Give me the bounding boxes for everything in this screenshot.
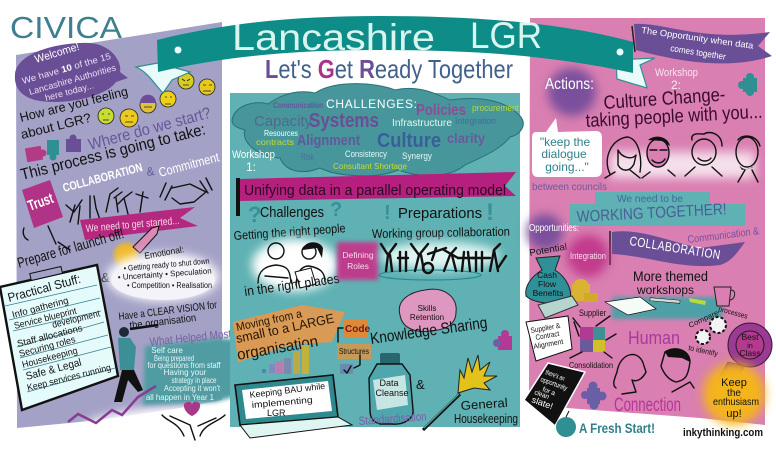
icon: cash flow bag: Benefits	[533, 288, 563, 298]
subtitle: let's get ready together: Let's Get Ready Together	[265, 54, 513, 84]
heading: culture change: Culture Change-	[603, 85, 726, 114]
callout: keep the enthusiasm up: Keep	[721, 377, 747, 389]
clipboard: practical stuff: Securing roles	[18, 334, 77, 360]
callout: supplier and contract alignment	[526, 316, 572, 361]
label: workshop 2	[655, 67, 698, 92]
illustration: brain skills retention: Skills	[418, 304, 436, 313]
banner: moving to a large organisation	[233, 305, 345, 364]
illustration: laptop keeping BAU: LGR	[267, 408, 286, 418]
welcome speech bubble: We have 10 of the 15	[21, 51, 112, 86]
label: actions	[545, 68, 596, 116]
heading: how are you feeling: about LGR?	[19, 110, 93, 142]
what helped most panel: strategy in place	[172, 376, 217, 385]
clipboard: practical stuff: Practical Stuff:	[6, 272, 82, 305]
flow: code to structures	[337, 320, 371, 374]
icon: rocket	[114, 226, 159, 267]
callout: defining roles	[337, 242, 378, 280]
illustration: laptop keeping BAU: implementing	[251, 395, 313, 410]
cloud: challenges: Systems	[309, 110, 379, 132]
clipboard: practical stuff: Info gathering	[11, 295, 70, 321]
icon: raised hands	[66, 188, 148, 224]
what helped most panel: all happen in Year 1	[146, 393, 215, 402]
diagram: compare processes with gears: processes	[717, 304, 749, 321]
callout: supplier and contract alignment: Supplier &	[530, 321, 561, 335]
heading: connection: Connection	[614, 395, 681, 416]
icon: emoji faces	[98, 73, 215, 127]
heading: preparations	[384, 199, 494, 226]
badge: best in class rosette	[718, 323, 772, 382]
banner: moving to a large organisation: small to a LARGE	[235, 310, 336, 346]
label: workshop 2: 2:	[671, 78, 681, 92]
cloud: challenges: Risk	[301, 152, 314, 162]
speech bubble: keep the dialogue going: "keep the	[540, 135, 590, 149]
welcome speech bubble: Welcome!	[33, 41, 81, 66]
heading: prepare for launch off: Prepare for launch off!	[16, 226, 126, 272]
badge: trust	[22, 180, 63, 228]
right ribbon tail	[616, 58, 655, 88]
badge: trust: Trust	[26, 190, 56, 215]
ampersand: &	[101, 270, 110, 285]
title text: Lancashire	[232, 17, 435, 58]
speech bubble: keep the dialogue going	[532, 118, 602, 177]
callout: keep the enthusiasm up	[703, 363, 765, 425]
heading: how are you feeling	[18, 84, 129, 142]
heading: challenges: ?	[330, 199, 342, 221]
heading: human: Human	[628, 328, 680, 348]
what helped most panel: What Helped Most	[149, 326, 232, 349]
badge: best in class rosette: Class	[739, 348, 761, 358]
heading: where do we start: Where do we start?	[87, 105, 213, 154]
diagram: compare processes with gears: to identify	[688, 343, 719, 358]
callout: integration	[567, 235, 609, 277]
heading: this process: This process is going to take:	[19, 121, 207, 184]
cloud: emotional: • Getting ready to shut down	[123, 257, 210, 273]
what helped most panel: for questions from staff	[148, 361, 221, 370]
cloud: challenges: Communication	[273, 101, 323, 110]
heading: collaboration and commitment	[61, 149, 221, 195]
welcome speech bubble: Lancashire Authorities	[28, 62, 118, 97]
chalkboard: fresh start: for a	[541, 386, 556, 397]
text: general housekeeping	[454, 396, 518, 426]
cloud: emotional: • Competition • Realisation	[127, 281, 212, 290]
text: general housekeeping: Housekeeping	[454, 412, 518, 426]
icon: cash flow bag: Flow	[538, 279, 557, 289]
cloud: challenges: Policies	[416, 102, 466, 119]
callout: defining roles: Defining	[342, 250, 374, 260]
heading: knowledge sharing: Knowledge Sharing	[369, 315, 488, 348]
text: a fresh start: A Fresh Start!	[579, 420, 655, 436]
callout: keep the enthusiasm up: up!	[726, 408, 742, 420]
clipboard: practical stuff: Safe & Legal	[25, 357, 83, 383]
what helped most panel: Being prepared	[154, 354, 194, 363]
diagram: supplier consolidation puzzle: Supplier	[579, 308, 606, 319]
cloud: challenges: procurement	[472, 103, 519, 113]
heading: challenges: ?	[248, 202, 261, 227]
clipboard: practical stuff: Staff allocations	[16, 323, 84, 350]
cloud: challenges: Consistency	[345, 149, 387, 159]
icon: apple	[556, 411, 576, 437]
label: workshop 1	[232, 149, 275, 174]
ribbon: the opportunity: comes together	[670, 43, 727, 62]
callout: defining roles: Roles	[347, 261, 369, 271]
welcome speech bubble	[15, 41, 128, 103]
heading: collaboration and commitment: &	[145, 164, 155, 179]
cloud: emotional	[107, 244, 219, 301]
chalkboard: fresh start: opportunity	[539, 376, 568, 393]
diagram: compare processes with gears: Compare	[687, 308, 720, 330]
icon: handshake	[160, 178, 212, 204]
teal banner	[157, 16, 633, 73]
white band behind faces	[610, 152, 755, 178]
clipboard: practical stuff: Housekeeping	[21, 346, 79, 371]
credit: inkythinking.com: inkythinking.com	[683, 427, 763, 439]
cloud: emotional: Emotional:	[144, 244, 185, 261]
icon: pink puzzle piece	[493, 330, 512, 350]
text: working group collaboration: Working group collaboration	[372, 225, 510, 241]
clipboard: practical stuff: Keep services running	[26, 362, 112, 394]
cloud: challenges: contracts	[256, 137, 294, 147]
heading: challenges: Challenges	[260, 204, 324, 221]
label: standardisation: Standardisation	[358, 409, 427, 428]
left panel background	[16, 22, 222, 428]
text: more themed workshops: More themed	[633, 268, 708, 284]
label: potential: Potential	[529, 242, 568, 259]
label: workshop 1: Workshop	[232, 149, 275, 161]
cloud: challenges: Alignment	[297, 132, 360, 149]
what helped most panel: Self care	[151, 346, 183, 355]
heading: clear vision: Have a CLEAR VISION for	[118, 299, 218, 323]
callout: integration: Integration	[570, 251, 606, 262]
heading: clear vision: the organisation	[129, 312, 197, 332]
logo: CIVICA: CIVICA	[10, 10, 122, 45]
white fade at bottom of left panel	[80, 406, 320, 450]
banner: moving to a large organisation: Moving from a	[235, 308, 304, 334]
cloud: challenges: CHALLENGES:	[326, 97, 418, 111]
ampersand: &	[416, 377, 425, 392]
cloud: challenges: Infrastructure	[392, 118, 452, 129]
heading: collaboration and commitment: COLLABORATION	[61, 160, 144, 195]
heading: clear vision	[118, 299, 218, 332]
icon: cash flow bag: Cash	[537, 270, 557, 280]
label: opportunities	[527, 214, 579, 250]
text: more themed workshops	[633, 268, 708, 297]
cloud: challenges: Culture	[377, 130, 441, 152]
illustration: group of people	[379, 242, 506, 280]
clipboard: practical stuff	[0, 265, 118, 410]
illustration: two profile faces	[614, 349, 694, 394]
callout: supplier and contract alignment: Alignment	[533, 337, 565, 351]
icon: cupped hands with heart	[162, 402, 225, 440]
label: actions: Actions:	[545, 76, 594, 93]
diagram: supplier consolidation puzzle	[569, 308, 616, 370]
title banner	[136, 15, 655, 93]
heading: collaboration and commitment: Commitment	[157, 149, 221, 180]
banner: unifying data	[236, 172, 516, 216]
what helped most panel	[143, 326, 240, 405]
icon: hand on lever	[23, 226, 70, 250]
left ribbon tail	[136, 63, 190, 93]
illustration: brain skills retention	[399, 289, 456, 331]
speech bubble: keep the dialogue going: dialogue	[541, 147, 587, 161]
cloud: challenges: Resources	[264, 129, 298, 138]
cloud: challenges: Integration	[455, 116, 496, 126]
illustration: four faces	[605, 132, 760, 182]
icon: three puzzle pieces	[25, 134, 81, 162]
cloud: challenges: Synergy	[402, 151, 432, 161]
callout: keep the enthusiasm up: enthusiasm	[713, 397, 759, 408]
what helped most panel: Having your	[164, 368, 207, 377]
text: getting the right people: Getting the right people	[233, 221, 346, 243]
text: more themed workshops: workshops	[636, 283, 694, 297]
banner: working together: WORKING TOGETHER!	[576, 201, 727, 226]
cloud: challenges: clarity	[447, 130, 485, 146]
diagram: supplier consolidation puzzle: Consolidation	[569, 360, 613, 370]
clipboard: practical stuff: development	[51, 308, 102, 331]
cloud: challenges: Consultant Shortage	[333, 161, 407, 171]
flow: code to structures: Code	[345, 324, 370, 335]
what helped most panel: Accepting it won't	[164, 384, 221, 393]
figure: person with telescope on rising line	[114, 325, 158, 402]
panel: left column	[0, 22, 320, 450]
heading: challenges	[248, 199, 342, 227]
text: in the right places: in the right places	[243, 271, 341, 299]
banner: unifying data: Unifying data in a parallel operating model	[244, 182, 506, 199]
illustration: data cleanse bottle	[369, 353, 413, 424]
panel: right column	[524, 18, 772, 426]
ribbon eyelets	[174, 46, 182, 54]
diagram: compare processes with gears	[687, 304, 749, 358]
illustration: data cleanse bottle: Data	[379, 378, 399, 388]
welcome speech bubble: here today...	[44, 80, 95, 103]
ribbon: we need to get started	[80, 207, 198, 240]
cloud: challenges	[232, 84, 523, 176]
heading: preparations: Preparations	[398, 205, 482, 222]
label: between councils: between councils	[532, 181, 607, 193]
arrow: rising zigzag	[68, 386, 156, 423]
heading: how are you feeling: How are you feeling	[18, 84, 129, 125]
cloud: emotional: • Uncertainty • Speculation	[118, 266, 212, 282]
cloud: challenges: Capacity	[254, 113, 312, 130]
chalkboard: fresh start: slate!	[530, 394, 554, 411]
badge: best in class rosette: in	[747, 343, 753, 350]
icon: teal puzzle piece	[738, 73, 757, 96]
icon: coins and banknotes	[538, 279, 598, 318]
chalkboard: fresh start	[524, 363, 585, 426]
callout: keep the enthusiasm up: the	[727, 388, 741, 399]
ribbon: collaboration: COLLABORATION	[629, 233, 722, 262]
illustration: brain skills retention: Retention	[410, 313, 444, 322]
right panel background	[529, 18, 765, 425]
banner: working together: We need to be	[617, 193, 683, 205]
panel: centre column	[230, 84, 523, 438]
illustration: laptop keeping BAU	[235, 375, 352, 438]
speech bubble: keep the dialogue going: going..."	[545, 160, 589, 174]
title banner: LGR	[470, 15, 542, 56]
centre panel background	[230, 93, 520, 427]
icon: purple puzzle piece	[581, 382, 606, 410]
icon: cash flow bag	[526, 256, 570, 303]
illustration: paper, pen, sweet and coffee	[605, 287, 735, 319]
illustration: two people	[252, 239, 338, 291]
icon: rising bar chart	[262, 345, 309, 374]
chalkboard: fresh start: clean	[533, 389, 550, 401]
chalkboard: fresh start: there's an	[544, 369, 566, 383]
ribbon: we need to get started: We need to get started...	[85, 215, 180, 235]
ribbon: the opportunity	[632, 24, 772, 63]
heading: preparations: !	[384, 202, 391, 224]
flow: code to structures: Structures	[339, 347, 369, 356]
heading: culture change	[585, 85, 763, 132]
illustration: laptop keeping BAU: Keeping BAU while	[249, 381, 326, 400]
banner: moving to a large organisation: organisation	[236, 333, 319, 364]
illustration: data cleanse bottle: Cleanse	[375, 388, 409, 398]
label: workshop 2: Workshop	[655, 67, 698, 79]
clipboard: practical stuff: Service blueprint	[13, 306, 78, 332]
ribbon: the opportunity: The Opportunity when data	[641, 25, 754, 51]
callout: supplier and contract alignment: Contract	[535, 329, 561, 342]
label: opportunities: Opportunities:	[529, 223, 579, 234]
label: workshop 1: 1:	[246, 160, 256, 174]
heading: preparations: !	[486, 199, 494, 226]
badge: best in class rosette: Best	[741, 332, 759, 342]
text: general housekeeping: General	[460, 396, 508, 413]
icon: feather duster	[423, 355, 497, 430]
label: communication and: Communication &	[687, 225, 760, 246]
